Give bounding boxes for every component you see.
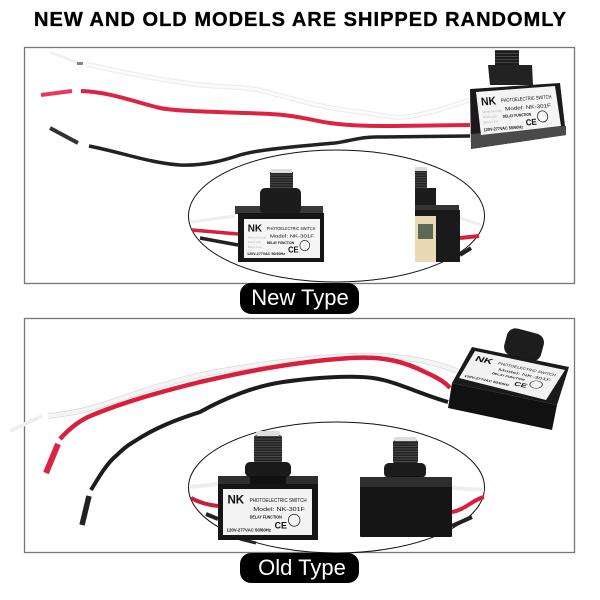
inset product label	[247, 223, 315, 256]
inset product label: 120V-277VAC 50/60Hz	[227, 527, 272, 532]
product label: Model: NK-301F	[505, 103, 551, 113]
product label: CE	[525, 116, 538, 128]
inset product label: Red:Load	[248, 240, 261, 244]
product label: NK	[480, 95, 497, 109]
white wire	[50, 52, 470, 117]
red wire	[46, 358, 450, 473]
inset wires right	[452, 488, 484, 526]
inset ellipse: old type front and back	[188, 422, 484, 553]
product label: PHOTOELECTRIC SWITCH	[501, 94, 552, 104]
product label: Black:Line	[483, 119, 498, 125]
badge: New Type: New Type	[251, 285, 349, 310]
product label: White:Neutral	[482, 109, 502, 114]
inset product label: PHOTOELECTRIC SWITCH	[267, 226, 315, 231]
product label: DELAY FUNCTION	[503, 112, 532, 119]
device: new type main	[470, 50, 566, 149]
product label: DELAY FUNCTION	[491, 372, 526, 382]
product label: CE	[513, 380, 529, 389]
inset product label: DELAY FUNCTION	[267, 241, 295, 245]
white wire	[10, 356, 457, 431]
inset device back	[415, 167, 460, 262]
inset product label: DELAY FUNCTION	[250, 514, 282, 519]
badge: New Type	[240, 283, 359, 314]
panel: new type	[24, 48, 574, 284]
badge: Old Type: Old Type	[258, 555, 346, 580]
product label: Model: NK-301F	[497, 368, 552, 383]
inset product label: White:Neutral	[248, 235, 267, 240]
inset product label: Black:Line	[248, 245, 262, 249]
inset device front	[235, 169, 324, 262]
panel: old type	[10, 318, 574, 553]
black wire	[50, 128, 470, 165]
product label: PHOTOELECTRIC SWITCH	[497, 362, 557, 378]
inset product label	[227, 494, 307, 532]
inset wires left	[189, 484, 256, 543]
inset product label: CE	[288, 245, 299, 255]
product label: NK	[473, 355, 495, 366]
inset product label: 120V-277VAC 50/60Hz	[247, 252, 285, 256]
inset wires right	[460, 218, 481, 255]
inset device front	[218, 431, 318, 540]
product label: Red:Load	[483, 114, 497, 119]
title: NEW AND OLD MODELS ARE SHIPPED RANDOMLY	[34, 9, 567, 31]
inset device back	[360, 437, 452, 537]
product label	[480, 91, 555, 132]
inset product label: Model: NK-301F	[253, 507, 306, 513]
product label: 120V-277VAC 50/60Hz	[463, 374, 511, 387]
inset product label: PHOTOELECTRIC SWITCH	[250, 498, 307, 504]
product label	[463, 355, 558, 395]
red wire	[41, 91, 470, 126]
black wire	[82, 377, 448, 525]
badge: Old Type	[240, 553, 359, 583]
inset product label: CE	[275, 520, 287, 531]
product label: 120V-277VAC 50/60Hz	[483, 124, 523, 132]
inset product label: NK	[227, 494, 245, 507]
inset product label: NK	[248, 223, 263, 235]
inset ellipse: new type front and back	[188, 150, 484, 282]
inset wires left	[191, 216, 238, 245]
inset product label: Model: NK-301F	[270, 234, 314, 239]
device: old type main	[448, 326, 569, 430]
